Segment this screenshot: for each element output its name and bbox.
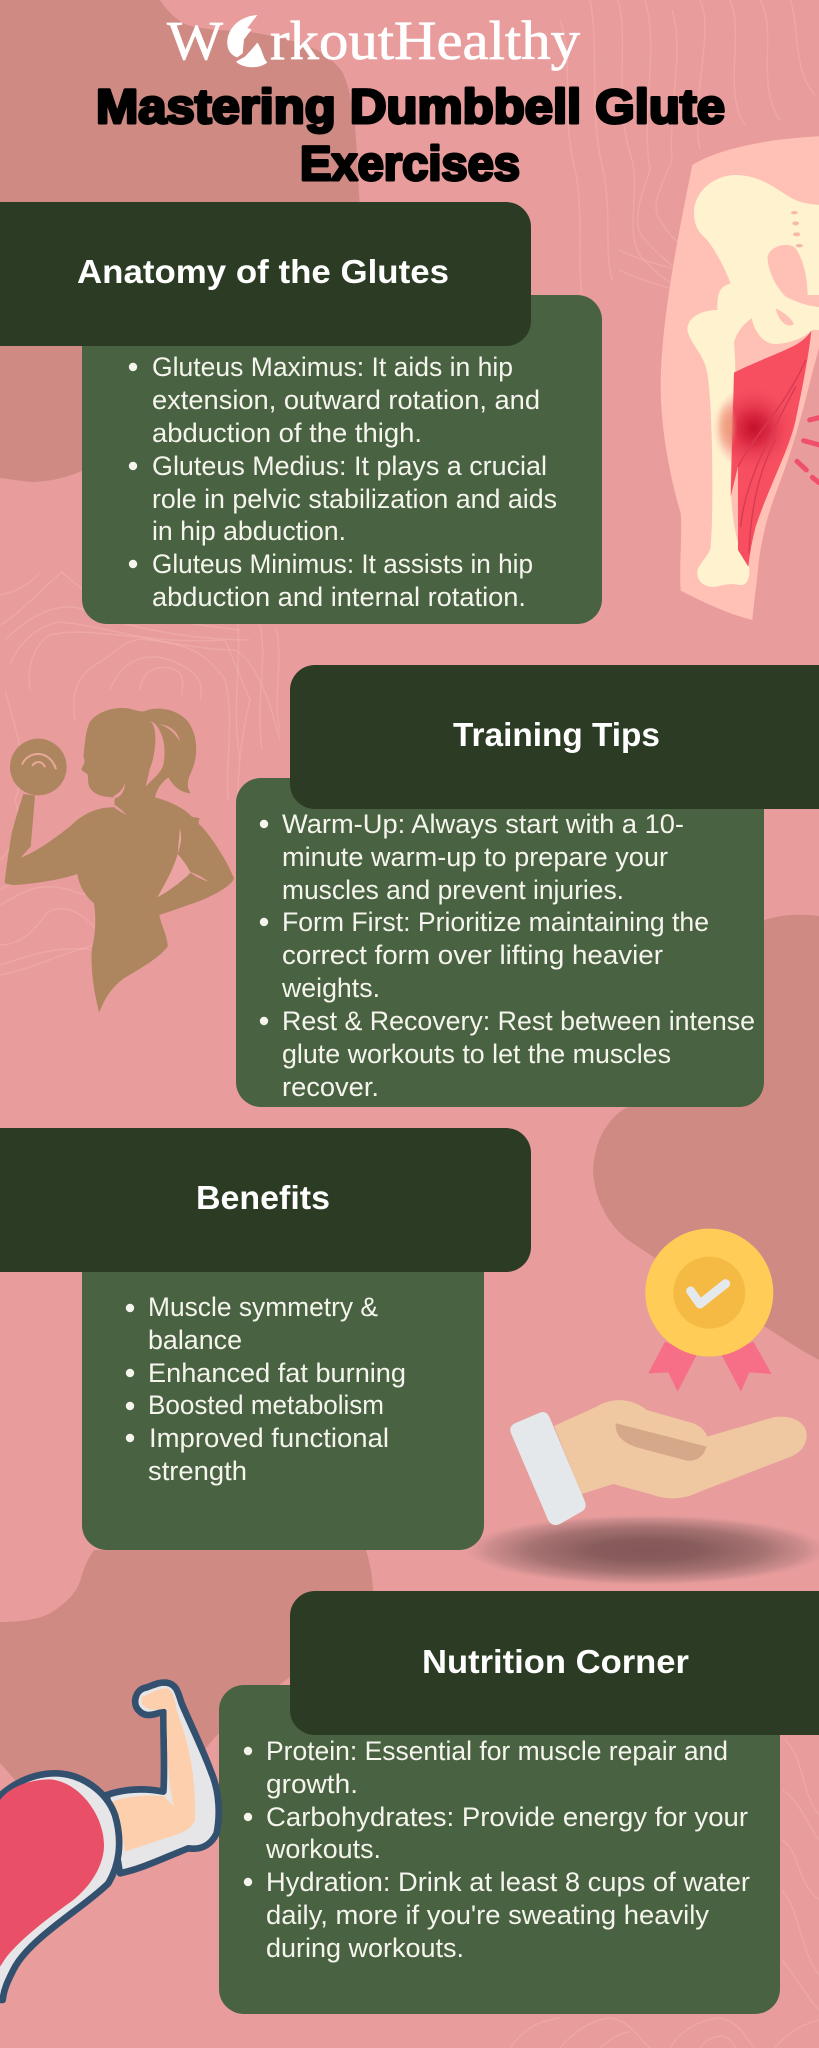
adductor muscle	[731, 331, 811, 567]
bullet list: daily, more if you're sweating heavily	[266, 1900, 709, 1930]
heading: Nutrition Corner	[422, 1643, 689, 1680]
bullet list	[260, 809, 755, 1102]
leg skin	[661, 136, 819, 620]
bullet list: correct form over lifting heavier	[282, 940, 663, 970]
logo wordmark start: W	[167, 10, 223, 71]
muscle fibres	[738, 360, 806, 553]
bullet list: extension, outward rotation, and	[152, 385, 540, 415]
bullet list: Boosted metabolism	[148, 1390, 384, 1420]
title: Mastering Dumbbell Glute	[96, 81, 725, 134]
panel body	[82, 295, 602, 624]
heading: Anatomy of the Glutes	[77, 253, 449, 290]
arm outline	[107, 1683, 219, 1873]
bullet list: abduction and internal rotation.	[152, 582, 526, 612]
bullet list: Warm-Up: Always start with a 10-	[282, 809, 684, 839]
arm skin	[112, 1688, 195, 1852]
bullet list: minute warm-up to prepare your	[282, 842, 668, 872]
bullet list	[244, 1736, 750, 1963]
bullet list: role in pelvic stabilization and aids	[152, 484, 557, 514]
hair highlight	[159, 724, 180, 742]
pelvis and femur bone	[687, 175, 819, 587]
sacrum dots	[791, 211, 803, 247]
bullet list: Muscle symmetry &	[148, 1292, 378, 1322]
illustration: flexed arm heart	[0, 1683, 219, 2000]
medal disc	[645, 1229, 773, 1357]
bullet list: workouts.	[265, 1834, 381, 1864]
bullet list: balance	[148, 1325, 242, 1355]
medal ribbons	[648, 1342, 772, 1392]
bullet list: Enhanced fat burning	[148, 1358, 406, 1388]
panel: benefits	[0, 1128, 531, 1550]
dumbbell highlights	[22, 754, 56, 769]
panel header	[0, 1128, 531, 1272]
illustration: hand holding medal	[467, 1229, 819, 1585]
logo icon: glute figure in letter O	[227, 15, 267, 67]
bullet list: Hydration: Drink at least 8 cups of water	[266, 1867, 750, 1897]
background blob: top left	[0, 0, 360, 482]
hand	[554, 1400, 807, 1498]
palm shading	[616, 1423, 707, 1461]
shoulder highlight	[115, 805, 127, 815]
bullet list: Rest & Recovery: Rest between intense	[282, 1006, 755, 1036]
bullet list	[126, 1292, 406, 1486]
logo: WorkoutHealthy	[167, 10, 581, 71]
bullet list: recover.	[282, 1072, 379, 1102]
bullet list: in hip abduction.	[152, 516, 346, 546]
obturator hole	[776, 308, 794, 325]
elbow highlight	[190, 872, 208, 882]
background blob: right	[593, 915, 819, 1360]
bullet list	[129, 352, 557, 612]
title: Exercises	[300, 138, 520, 191]
pain dashes	[797, 417, 819, 483]
bullet list: strength	[148, 1456, 247, 1486]
dumbbell	[10, 739, 67, 795]
medal check mark	[691, 1284, 726, 1304]
bullet list: Gluteus Medius: It plays a crucial	[152, 451, 547, 481]
pelvic opening	[768, 245, 819, 307]
bullet list: Gluteus Maximus: It aids in hip	[152, 352, 513, 382]
illustration: woman lifting dumbbell	[5, 708, 234, 1013]
panel body	[236, 778, 764, 1107]
bullet list: muscles and prevent injuries.	[282, 875, 624, 905]
background contour lines: left	[0, 572, 280, 975]
bullet list: abduction of the thigh.	[152, 418, 422, 448]
panel body	[82, 1240, 484, 1550]
heading: Benefits	[196, 1179, 330, 1216]
panel header	[290, 665, 819, 809]
woman silhouette	[5, 708, 234, 1013]
bullet list: Form First: Prioritize maintaining the	[282, 907, 709, 937]
muscle pain spot	[712, 385, 796, 472]
bullet list: glute workouts to let the muscles	[282, 1039, 671, 1069]
panel body	[219, 1685, 780, 2014]
bullet list: growth.	[266, 1769, 358, 1799]
gap between torso and arm	[157, 828, 191, 897]
ground shadow	[467, 1515, 819, 1585]
bullet list: Carbohydrates: Provide energy for your	[266, 1802, 748, 1832]
panel header	[0, 202, 531, 346]
panel: nutrition corner	[219, 1591, 819, 2014]
bullet list: Gluteus Minimus: It assists in hip	[152, 549, 533, 579]
background contour lines: bottom right	[510, 1740, 819, 2048]
illustration: leg anatomy	[661, 136, 819, 620]
bullet list: Improved functional	[149, 1423, 389, 1453]
logo wordmark end: rkoutHealthy	[270, 10, 581, 71]
medal inner disc	[673, 1257, 745, 1329]
bullet list: during workouts.	[266, 1933, 464, 1963]
heart outline	[0, 1773, 119, 2000]
panel: anatomy of the glutes	[0, 202, 602, 624]
panel: training tips	[236, 665, 819, 1107]
title	[96, 81, 725, 191]
panel header	[290, 1591, 819, 1735]
background contour lines: top right	[560, 0, 815, 320]
bullet list: weights.	[281, 973, 380, 1003]
jaw highlight	[113, 783, 125, 798]
bone glow	[717, 402, 737, 452]
bullet list: Protein: Essential for muscle repair and	[266, 1736, 728, 1766]
shirt cuff	[510, 1412, 586, 1525]
heading: Training Tips	[453, 716, 660, 753]
heart red fill	[0, 1779, 104, 1967]
ponytail gap	[146, 721, 165, 787]
background blob: bottom left	[0, 1550, 400, 1850]
